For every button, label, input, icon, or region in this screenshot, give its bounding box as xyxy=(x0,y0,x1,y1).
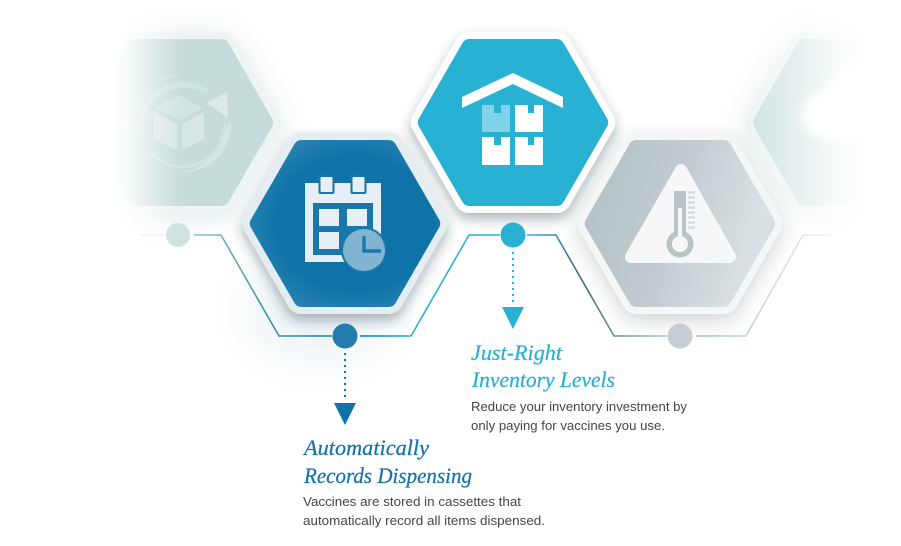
icon: warning triangle with thermometer xyxy=(631,170,730,258)
text block: Just-Right Inventory Levels: Inventory Levels xyxy=(471,367,615,392)
text block: Automatically Records Dispensing: Records Dispensing xyxy=(303,463,472,488)
text block: Just-Right Inventory Levels xyxy=(471,340,687,433)
connector dot: grey xyxy=(668,324,692,348)
connector dot: teal xyxy=(500,222,526,248)
text block: Just-Right Inventory Levels: Reduce your inventory investment by xyxy=(471,399,687,414)
connector line network xyxy=(140,235,832,336)
connector dot: blue xyxy=(332,324,358,348)
panel: faded left hexagon with recycling box icon xyxy=(91,47,265,198)
text block: Automatically Records Dispensing: Automatically xyxy=(302,435,429,460)
connector dot: left faded xyxy=(166,223,190,247)
panel: teal hexagon warehouse xyxy=(426,47,600,198)
panel: faded right hexagon xyxy=(761,47,901,198)
icon: calendar with clock xyxy=(305,175,387,273)
arrow: teal dotted pointer xyxy=(502,252,524,329)
arrow: blue dotted pointer xyxy=(334,353,356,425)
icon: warehouse with boxes xyxy=(462,73,563,165)
panel: blue hexagon calendar xyxy=(258,148,432,299)
icon: box with circular arrows xyxy=(136,75,231,172)
panel: grey hexagon warning xyxy=(593,148,767,299)
icon: faded white shape xyxy=(802,65,901,140)
text block: Automatically Records Dispensing: automatically record all items dispensed. xyxy=(303,513,545,528)
soft halo beneath blue hexagon xyxy=(245,260,395,360)
text block: Automatically Records Dispensing: Vaccines are stored in cassettes that xyxy=(303,494,521,509)
text block: Just-Right Inventory Levels: only paying for vaccines you use. xyxy=(471,418,665,433)
text block: Automatically Records Dispensing xyxy=(302,435,545,528)
text block: Just-Right Inventory Levels: Just-Right xyxy=(471,340,563,365)
